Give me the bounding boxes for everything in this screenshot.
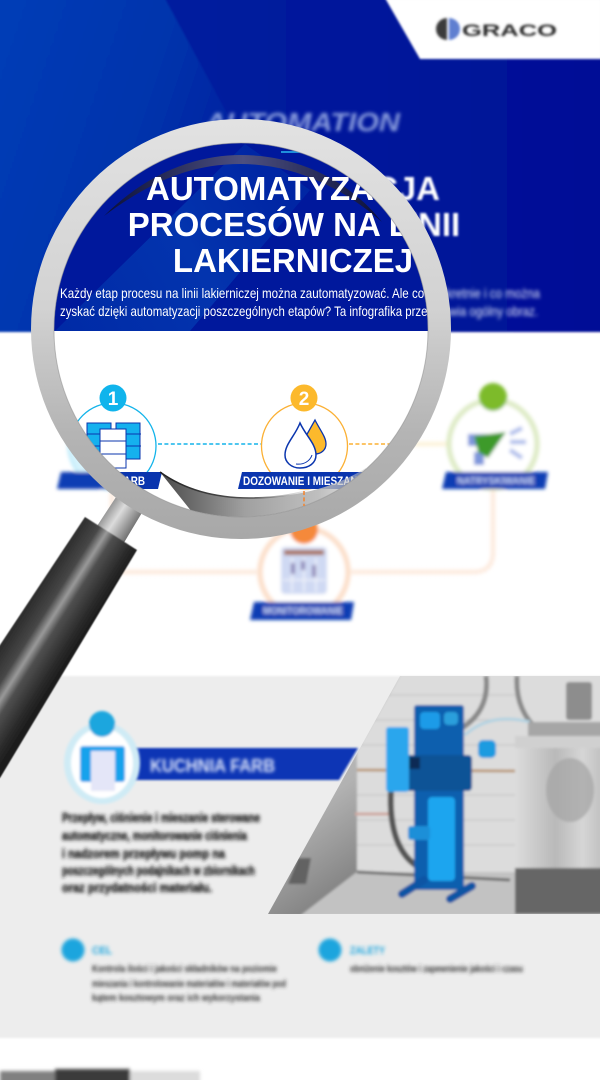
logo panel <box>385 0 600 59</box>
lens title <box>130 176 411 272</box>
node 3 spray dots <box>510 428 526 458</box>
photo tank reflection <box>546 758 594 822</box>
pump sensor <box>478 740 496 758</box>
hero right background <box>0 0 600 332</box>
intro text (out of focus) <box>60 285 540 319</box>
section icon halo <box>64 722 140 804</box>
lens connector blue <box>158 443 261 445</box>
body line 5: oraz przydatności materiału. <box>62 881 212 895</box>
connector: step 2 to 3 <box>350 442 448 446</box>
logo mark blue <box>449 18 460 40</box>
benefits heading: ZALETY <box>350 945 386 957</box>
node 3 spray gun icon <box>474 432 506 458</box>
pump side arm <box>408 826 430 840</box>
node 4 calendar bars <box>293 561 314 577</box>
node 1 tanks icon <box>87 423 141 468</box>
lens view (in focus) <box>54 143 428 517</box>
lens kicker accent <box>281 151 302 153</box>
node 3 ring <box>449 400 537 488</box>
node 1 halo <box>69 401 157 489</box>
logo word: GRACO <box>462 21 557 40</box>
pump filter <box>386 727 409 792</box>
benefits line 1: obniżenie kosztów i zapewnienie jakości i czasu <box>350 963 523 975</box>
node 2 number: 2 <box>299 389 309 410</box>
body line 1: Przepływ, ciśnienie i mieszanie sterowane <box>62 811 260 825</box>
magnifier inner edge <box>54 143 428 517</box>
lens white background <box>54 143 428 492</box>
title line 3: LAKIERNICZEJ <box>173 242 413 279</box>
dotted divider <box>62 913 600 917</box>
column: goal <box>62 938 286 1004</box>
section icon inner <box>71 728 133 798</box>
column: benefits <box>318 938 523 975</box>
node 2 yellow drop <box>306 420 326 454</box>
node 3 <box>449 383 537 488</box>
magnifier collar <box>97 494 143 546</box>
tank left <box>87 423 111 459</box>
strip machine <box>55 1069 130 1080</box>
photo motor <box>566 682 592 720</box>
node 1 ring <box>70 403 156 489</box>
section icon <box>64 711 140 804</box>
pump top display <box>420 712 440 729</box>
node 2 drop highlight <box>296 455 312 464</box>
node 4 <box>260 516 348 616</box>
hero banner (out of focus) <box>0 0 600 332</box>
title line 2: PROCESÓW NA LINII <box>128 206 460 243</box>
benefits icon <box>318 938 342 962</box>
node 1 fill tint <box>70 425 100 480</box>
logo mark dark <box>436 18 447 40</box>
photo back wall <box>340 670 600 875</box>
title (out of focus) <box>128 170 460 279</box>
body line 4: poszczególnych podajnikach w zbiornikach <box>62 864 255 878</box>
goal line 3: kątem kosztowym oraz ich wykorzystania <box>92 992 260 1004</box>
photo wall stripe <box>357 770 515 771</box>
lens hero triangle <box>55 144 310 331</box>
node 1 label <box>57 472 162 489</box>
node 2 ring <box>262 403 348 489</box>
node 1 label text: KUCHNIA FARB <box>70 474 145 488</box>
pump dark block <box>404 757 420 769</box>
magnifier ring <box>31 119 451 539</box>
goal line 1: Kontrola ilości i jakości składników na poziomie <box>92 963 277 975</box>
section background <box>0 676 600 1038</box>
node 3 spray gun body <box>468 434 490 465</box>
pump mid body <box>404 755 472 791</box>
node 4 calendar header <box>284 550 324 555</box>
pump top display 2 <box>444 712 458 725</box>
lens lower glare crescent <box>160 468 372 535</box>
goal heading: CEL <box>92 945 112 957</box>
photo tank <box>525 748 600 870</box>
node 1 badge <box>100 384 126 412</box>
node 3 label <box>442 472 548 489</box>
lens title line 2: PROCESÓW NA LINII <box>128 206 460 243</box>
node 4 label text: MONITOROWANIE <box>263 606 343 617</box>
node 4 badge <box>290 516 318 544</box>
photo pipes <box>462 676 538 730</box>
section icon tanks <box>80 746 125 782</box>
photo wall stripe lower <box>355 812 390 816</box>
lens upper glare arc <box>104 155 382 222</box>
pump lower body <box>428 797 455 881</box>
node 3 badge <box>479 383 507 411</box>
tank right <box>116 423 140 459</box>
node 2 badge <box>290 384 318 412</box>
barrel bands <box>100 441 126 454</box>
photo tank fittings <box>528 722 600 736</box>
photo tank lid <box>516 736 600 748</box>
goal icon <box>62 938 84 962</box>
photo tank base <box>515 868 600 914</box>
heading bar <box>130 748 358 780</box>
lens node 1 <box>57 384 162 489</box>
lens lower glare edge <box>160 472 315 498</box>
heading text: KUCHNIA FARB <box>150 756 275 776</box>
stem connector reflection <box>303 491 305 506</box>
node 4 ring <box>260 528 348 616</box>
lens title line 1: AUTOMATYZACJA <box>146 170 440 207</box>
body line 2: automatyczne, monitorowanie ciśnienia <box>62 829 248 843</box>
tank bands <box>87 434 141 446</box>
photo vent <box>288 858 311 884</box>
node 3 label text: NATRYSKIWANIE <box>457 476 535 487</box>
node 4 label <box>250 602 354 620</box>
section: paint kitchen <box>0 670 600 1038</box>
title line 1: AUTOMATYZACJA <box>146 170 440 207</box>
logo: Graco <box>436 18 557 40</box>
photo left wall <box>268 754 358 914</box>
pump hose <box>391 790 420 868</box>
strip light part <box>0 1071 200 1080</box>
lens title line 3: LAKIERNICZEJ <box>173 242 413 279</box>
pump feet <box>402 880 472 899</box>
lens hero background <box>54 143 428 331</box>
section badge <box>89 711 115 737</box>
photo: pump in paint kitchen <box>262 670 600 916</box>
node 4 calendar grid <box>283 558 325 592</box>
goal line 2: mieszania i kontrolowanie materiałów i materiałów pod <box>92 978 286 990</box>
photo tile lines <box>357 695 515 845</box>
magnifier <box>0 119 451 778</box>
node 2 label text: DOZOWANIE I MIESZANIE <box>243 474 367 488</box>
lens intro text <box>60 288 427 319</box>
kicker: automation: AUTOMATION <box>204 107 401 137</box>
node 1 number: 1 <box>108 389 119 410</box>
pump column <box>414 705 464 890</box>
barrel <box>100 429 126 468</box>
node 4 calendar icon <box>281 547 327 594</box>
photo pale blue tube <box>465 719 530 735</box>
section icon barrel <box>91 751 115 791</box>
lens node 2 <box>238 384 372 489</box>
photo floor <box>300 872 600 916</box>
next section photo strip <box>0 1069 200 1080</box>
hero left diagonal panel <box>0 0 345 332</box>
node 2 white drop <box>285 423 316 468</box>
process diagram (out of focus) <box>57 383 548 620</box>
lens connector orange <box>349 443 430 445</box>
strip dark part <box>0 1071 130 1080</box>
connector: step 3 to 4 to 1 <box>112 490 493 572</box>
body line 3: i nadzorem przepływu pomp na <box>62 847 226 861</box>
node 2 label <box>238 472 372 489</box>
node 1 label <box>57 472 162 489</box>
magnifier handle <box>0 517 137 778</box>
section body text <box>62 811 260 895</box>
photo skirting <box>357 872 510 880</box>
